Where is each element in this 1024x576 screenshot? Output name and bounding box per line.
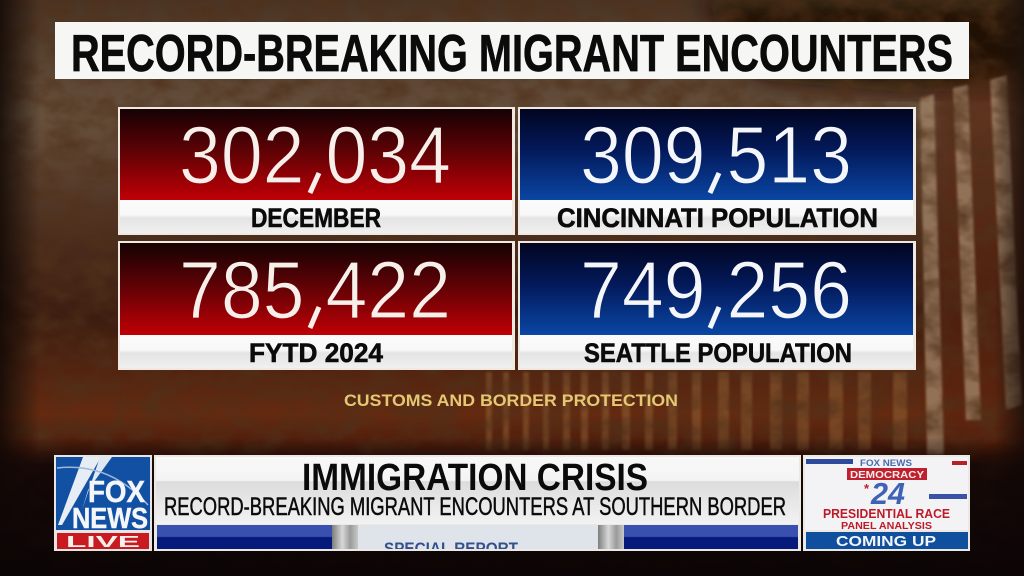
panel: December stat: 302,034 xyxy=(179,110,451,201)
panel: FYTD 2024 stat: 785,422 xyxy=(179,245,451,336)
panel: Democracy 24 coming up xyxy=(803,455,970,551)
subheadline: RECORD-BREAKING MIGRANT ENCOUNTERS AT SOUTHERN BORDER xyxy=(164,493,786,521)
icon: Fox News Live logo: NEWS xyxy=(72,503,148,535)
panel: Democracy 24 coming up: * xyxy=(864,481,870,496)
panel: FYTD 2024 stat xyxy=(118,241,515,370)
panel: Seattle population stat xyxy=(518,241,916,370)
panel: December stat xyxy=(118,107,515,235)
panel: Seattle population stat: SEATTLE POPULATION xyxy=(584,338,852,368)
headline: IMMIGRATION CRISIS xyxy=(302,457,648,499)
panel: Cincinnati population stat xyxy=(518,107,916,235)
panel: Democracy 24 coming up: COMING UP xyxy=(836,533,936,550)
panel: Seattle population stat: 749,256 xyxy=(580,245,852,336)
blue band with Special Report xyxy=(157,525,798,549)
blue band with Special Report: SPECIAL REPORT xyxy=(384,539,519,558)
panel: FYTD 2024 stat: FYTD 2024 xyxy=(249,338,383,368)
panel: Democracy 24 coming up: DEMOCRACY xyxy=(850,469,924,481)
panel: Democracy 24 coming up: 24 xyxy=(870,476,905,511)
panel: Cincinnati population stat: 309,513 xyxy=(580,110,852,201)
icon: Fox News Live logo xyxy=(54,455,152,551)
panel: Democracy 24 coming up: PRESIDENTIAL RACE xyxy=(823,506,950,521)
icon: Fox News Live logo: LIVE xyxy=(66,534,141,551)
panel: Democracy 24 coming up: FOX NEWS xyxy=(860,458,912,468)
icon: Fox News Live logo: FOX xyxy=(88,474,145,509)
panel: Democracy 24 coming up: PANEL ANALYSIS xyxy=(841,521,932,532)
source credit: CUSTOMS AND BORDER PROTECTION xyxy=(344,391,678,410)
lower third ticker xyxy=(154,455,801,551)
panel: Cincinnati population stat: CINCINNATI POPULATION xyxy=(557,203,878,233)
panel: December stat: DECEMBER xyxy=(251,203,381,233)
